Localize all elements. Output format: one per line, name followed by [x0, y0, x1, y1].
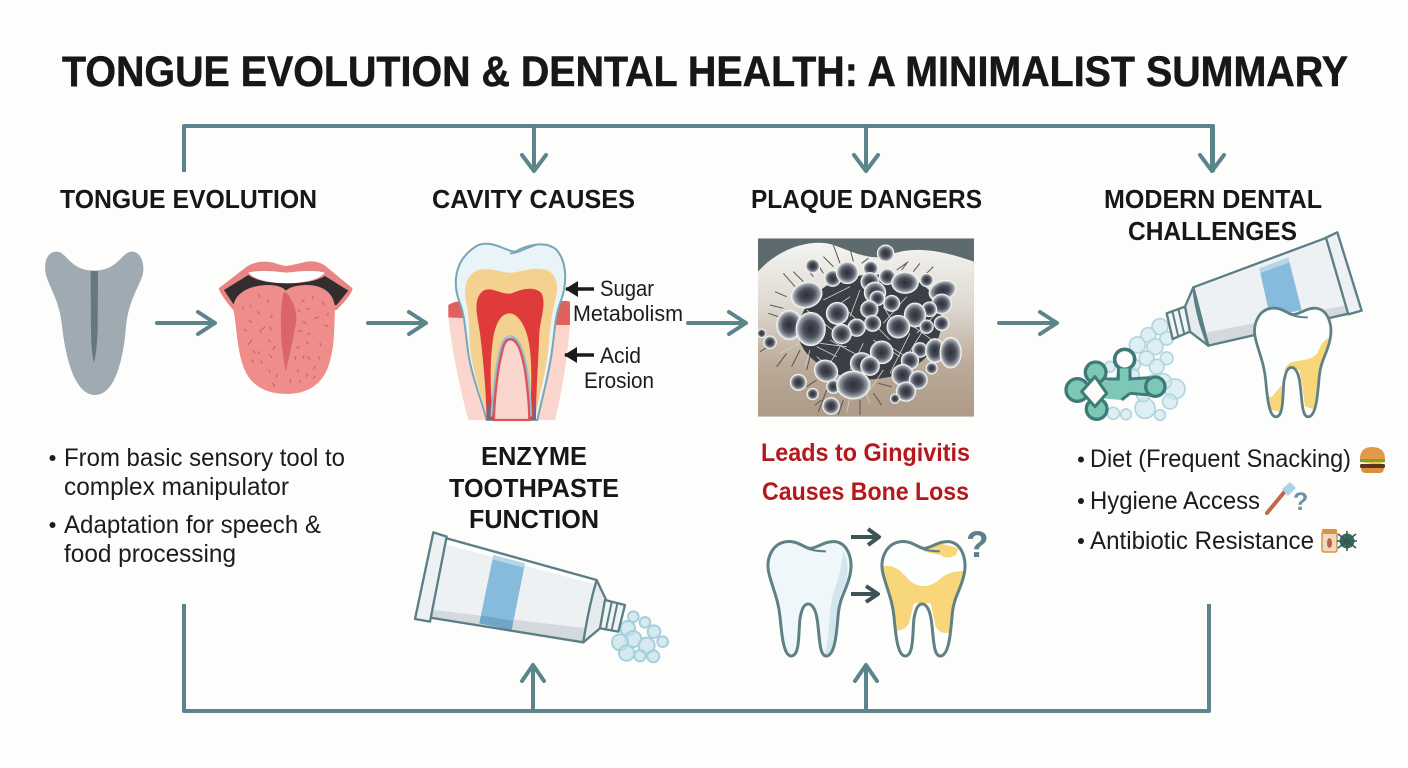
panel: modern dental challenges [1066, 184, 1385, 555]
callout: acid erosion: Acid [600, 343, 641, 368]
bullet list: tongue evolution: Adaptation for speech & [64, 511, 321, 539]
heading: enzyme toothpaste function: ENZYME [481, 441, 587, 471]
heading: cavity causes: CAVITY CAUSES [432, 184, 635, 214]
arrow: pink tongue to tooth [368, 312, 426, 334]
image: plaque bacteria micrograph [757, 238, 974, 417]
red warning text: Leads to Gingivitis [761, 439, 970, 467]
heading: enzyme toothpaste function: FUNCTION [469, 504, 599, 534]
panel: plaque dangers [751, 184, 989, 656]
arrow: tooth to plaque [688, 312, 746, 334]
bullet list: tongue evolution: From basic sensory tool to [64, 444, 345, 472]
bullet list: modern challenges [1078, 445, 1351, 555]
icon: plaque-affected tooth [877, 541, 971, 656]
heading: modern dental challenges: MODERN DENTAL [1104, 184, 1322, 214]
heading: enzyme toothpaste function: TOOTHPASTE [449, 473, 619, 503]
heading: modern dental challenges: CHALLENGES [1128, 216, 1297, 246]
icon: healthy tooth [768, 541, 851, 656]
bullet list: modern challenges: Antibiotic Resistance [1090, 527, 1314, 555]
arrow: grey tongue to pink tongue [157, 312, 215, 334]
arrow: plaque to modern challenges [999, 312, 1057, 334]
icon: question mark: ? [966, 524, 989, 565]
bullet list: modern challenges: Hygiene Access [1090, 487, 1260, 515]
callout: sugar metabolism [565, 276, 683, 326]
bottom feedback connector arrows [184, 604, 1209, 711]
red warning text [761, 439, 970, 506]
illustration: toothpaste, enzyme molecule and tooth [1066, 232, 1362, 420]
bullet list: tongue evolution: complex manipulator [64, 473, 289, 501]
heading: plaque dangers: PLAQUE DANGERS [751, 184, 982, 214]
heading: modern dental challenges [1104, 184, 1322, 246]
icon: burger [1360, 447, 1385, 473]
icon: basic grey tongue [45, 252, 143, 395]
icon: toothpaste tube with foam [415, 532, 668, 662]
top feedback connector arrows [184, 126, 1224, 172]
bullet list: modern challenges: Diet (Frequent Snacking) [1090, 445, 1351, 473]
icon: antibiotic jar and bacteria [1322, 529, 1357, 552]
bullet list: tongue evolution: food processing [64, 540, 236, 568]
panel: cavity causes [415, 184, 683, 662]
heading: enzyme toothpaste function [449, 441, 619, 534]
callout: acid erosion: Erosion [584, 368, 654, 393]
callout: sugar metabolism: Metabolism [573, 301, 683, 326]
arrows: healthy tooth to plaque tooth [851, 529, 879, 602]
panel: tongue evolution [45, 184, 426, 568]
red warning text: Causes Bone Loss [762, 478, 969, 506]
icon: toothbrush with question mark [1267, 482, 1308, 516]
icon: complex pink tongue [219, 261, 353, 394]
callout: acid erosion [564, 343, 654, 393]
diagram: tooth cross-section [448, 244, 570, 420]
heading: tongue evolution: TONGUE EVOLUTION [60, 184, 317, 214]
icon: stained tooth [1255, 308, 1333, 417]
icon: toothbrush with question mark: ? [1293, 488, 1308, 516]
bullet list: tongue evolution [50, 444, 345, 568]
callout: sugar metabolism: Sugar [600, 276, 654, 301]
icon: enzyme molecule [1066, 349, 1165, 419]
